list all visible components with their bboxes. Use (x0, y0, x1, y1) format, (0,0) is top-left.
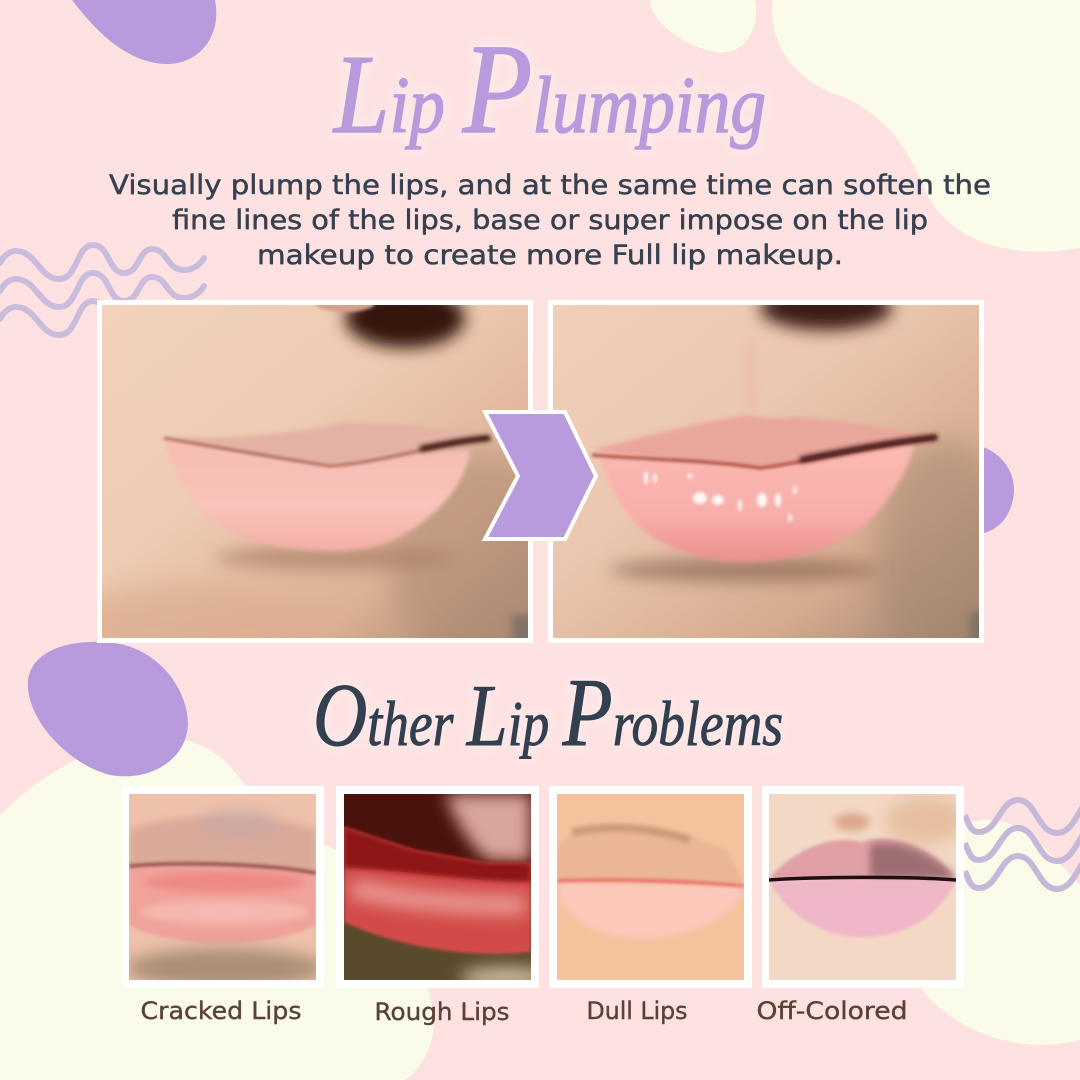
background blob: top right cream (772, 0, 1080, 252)
heading: other lip problems: Other Lip Problems (313, 659, 783, 767)
decoration: left waves (0, 245, 204, 335)
background blob: bottom right cream (920, 820, 1080, 1045)
caption: off-colored: Off-Colored (756, 997, 908, 1025)
title: Lip Plumping (332, 18, 766, 160)
card: rough lips (336, 786, 550, 990)
background blob: top left purple (72, 0, 216, 64)
background blob: left purple (28, 642, 188, 776)
card: dull lips (549, 786, 752, 988)
description text: fine lines of the lips, base or super impose on the lip (172, 205, 928, 236)
card: cracked lips (122, 786, 325, 988)
background blob: right purple (980, 446, 1014, 534)
decoration: right waves (965, 800, 1080, 889)
after photo frame (550, 302, 982, 640)
before photo frame (100, 302, 530, 640)
description text: Visually plump the lips, and at the same time can soften the (109, 170, 991, 201)
background blob: bottom left cream (0, 738, 434, 1080)
arrow: before to after (485, 412, 596, 539)
background blob: top cream small (650, 0, 756, 52)
caption: cracked lips: Cracked Lips (140, 997, 302, 1025)
caption: dull lips: Dull Lips (586, 997, 688, 1025)
description text (109, 170, 991, 271)
description text: makeup to create more Full lip makeup. (257, 240, 843, 271)
card: off-colored lips (762, 786, 965, 988)
panel: before photo (102, 305, 528, 638)
panel: after photo (553, 305, 979, 638)
captions (140, 997, 908, 1026)
caption: rough lips: Rough Lips (374, 998, 510, 1026)
